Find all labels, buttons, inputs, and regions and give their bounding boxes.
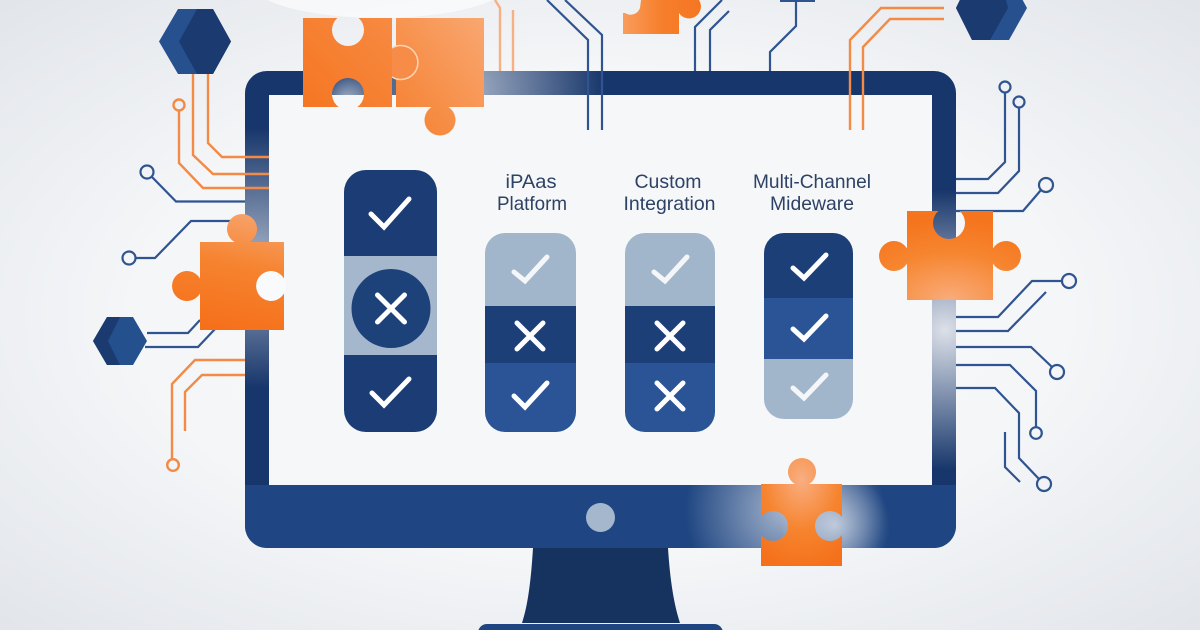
notch backing (256, 271, 286, 301)
icon: check (372, 379, 409, 405)
icon: check (654, 257, 687, 281)
icon: check (514, 257, 547, 281)
middle segment (625, 306, 715, 363)
circuit traces: top, orange (495, 0, 944, 130)
column 2: status stack (485, 233, 576, 432)
hexagon: left (93, 317, 147, 365)
puzzle piece: right (879, 211, 1021, 300)
column 3: status stack (625, 233, 715, 432)
column 3 heading: Integration (624, 193, 716, 215)
bottom segment (485, 363, 576, 432)
column 4 heading: Multi-Channel (753, 171, 871, 193)
middle segment (344, 256, 437, 355)
monitor screen (269, 95, 932, 485)
monitor chin (245, 485, 956, 548)
column 4: status stack (764, 233, 853, 419)
circuit traces: right, blue (956, 82, 1076, 491)
background highlight (250, 0, 510, 18)
middle segment (485, 306, 576, 363)
icon: cross (657, 323, 683, 349)
column 3 heading: Custom (634, 171, 702, 193)
top segment (625, 233, 715, 306)
bezel highlights (245, 71, 956, 548)
puzzle piece: left (172, 214, 286, 330)
icon: check (371, 199, 409, 227)
column 1: status stack (344, 170, 437, 432)
column 3 heading (624, 171, 716, 215)
bottom segment (625, 363, 715, 432)
hexagon: top right (956, 0, 1027, 40)
hexagon: top left (159, 9, 231, 74)
monitor stand (522, 548, 680, 623)
bottom segment (764, 359, 853, 419)
puzzle piece: top right of pair (392, 18, 484, 136)
column 2 heading: Platform (497, 193, 567, 215)
top segment (344, 170, 437, 256)
icon: check (514, 383, 547, 407)
column 4 heading (753, 171, 871, 215)
icon: check (793, 255, 826, 278)
icon: check (793, 316, 826, 339)
column 2 heading: iPAas (506, 171, 557, 193)
top segment (485, 233, 576, 306)
puzzle piece: top centre (623, 0, 701, 34)
monitor (245, 71, 956, 630)
bottom segment (344, 355, 437, 432)
icon: check (793, 375, 826, 398)
puzzle piece: top left (303, 18, 392, 107)
middle segment (764, 298, 853, 359)
puzzle piece: bottom (761, 458, 842, 566)
top segment (764, 233, 853, 298)
piece body (172, 214, 284, 330)
column 2 heading (497, 171, 567, 215)
icon: cross in circle (352, 269, 430, 348)
icon: cross (517, 323, 543, 349)
circuit traces: lower left, orange (167, 360, 245, 471)
icon: cross (657, 383, 683, 409)
circuit traces: left, blue (122, 166, 245, 347)
monitor base (478, 624, 723, 630)
circuit traces: upper left, orange (174, 74, 269, 188)
circuit traces: top, blue (547, 0, 815, 130)
column 4 heading: Mideware (770, 193, 854, 215)
power button (586, 503, 615, 532)
monitor bezel (245, 71, 956, 548)
